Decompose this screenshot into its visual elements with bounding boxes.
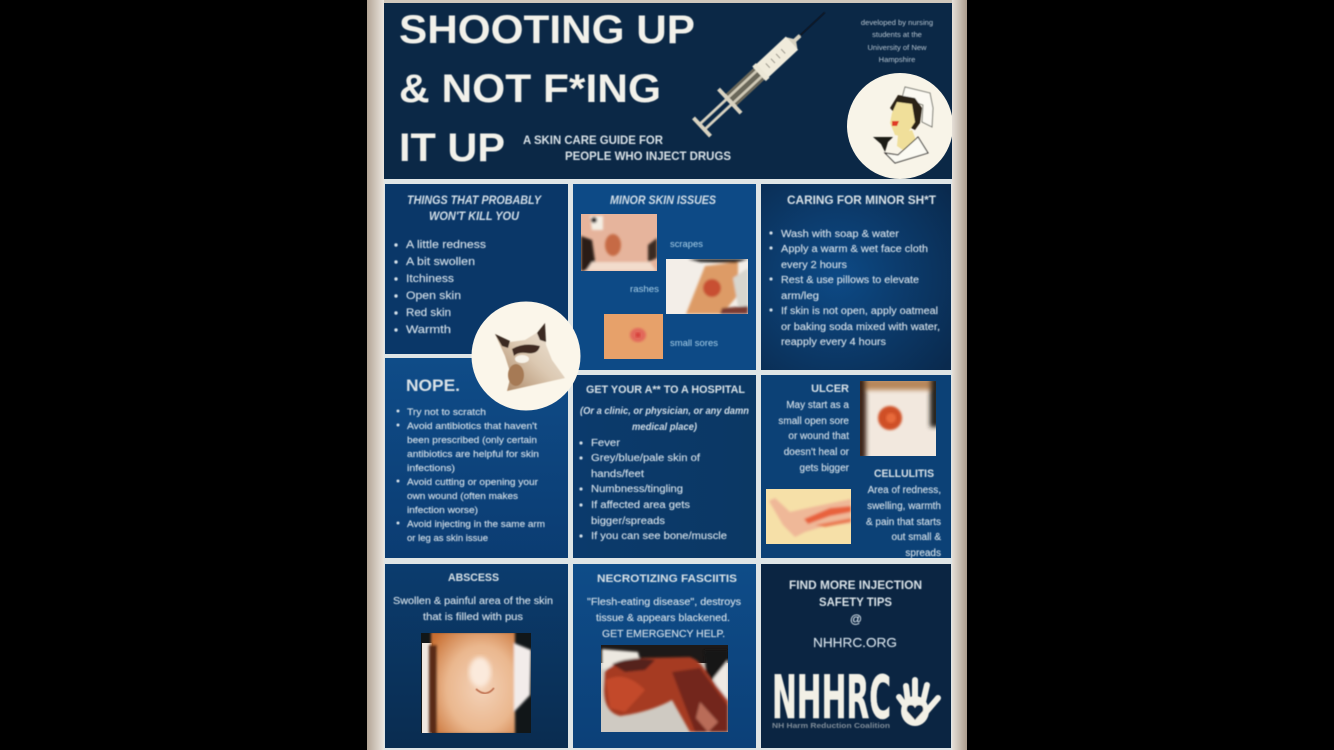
label: small sores: small sores (670, 338, 719, 348)
icon: grumpy cat (472, 302, 580, 410)
cellulitis text: Area of redness, (868, 485, 941, 496)
description: Swollen & painful area of the skin (393, 596, 553, 607)
label: scrapes: scrapes (670, 239, 704, 249)
symptom list (394, 239, 487, 336)
warning signs list: Grey/blue/pale skin of (591, 453, 700, 464)
poster background (367, 0, 967, 750)
don't list: Avoid cutting or opening your (407, 477, 538, 487)
call to action: FIND MORE INJECTION (789, 578, 922, 592)
panel: get to a hospital (573, 375, 756, 558)
don't list (396, 407, 545, 543)
description (393, 596, 553, 623)
description: GET EMERGENCY HELP. (602, 629, 725, 640)
care list: or baking soda mixed with water, (781, 322, 940, 333)
warning signs list: Fever (591, 438, 621, 449)
don't list: Avoid injecting in the same arm (407, 519, 545, 529)
warning signs list: bigger/spreads (591, 516, 665, 527)
care list: Apply a warm & wet face cloth (781, 244, 928, 255)
description: "Flesh-eating disease", destroys (587, 597, 741, 608)
symptom list: Open skin (406, 290, 461, 302)
call to action: @ (850, 612, 862, 626)
warning signs list: If you can see bone/muscle (591, 531, 727, 542)
title: SHOOTING UP (399, 8, 695, 52)
photo: small sores (604, 314, 663, 359)
heading (407, 195, 542, 223)
care list: Wash with soap & water (781, 229, 900, 240)
warning signs list: Numbness/tingling (591, 484, 683, 495)
cellulitis text: spreads (905, 548, 941, 559)
subtitle: A SKIN CARE GUIDE FOR (523, 133, 663, 147)
panel: abscess (385, 564, 568, 748)
cellulitis text: CELLULITIS (874, 468, 934, 480)
photo: necrotic leg (601, 645, 728, 732)
heading: CARING FOR MINOR SH*T (787, 193, 937, 207)
heading: NECROTIZING FASCIITIS (597, 573, 737, 585)
don't list: or leg as skin issue (407, 533, 488, 543)
panel: things that probably won't kill you (385, 184, 568, 354)
don't list: antibiotics are helpful for skin (407, 449, 539, 459)
subheading (580, 406, 749, 433)
don't list: Try not to scratch (407, 407, 486, 417)
symptom list: Warmth (406, 324, 451, 336)
ulcer text: May start as a (786, 400, 849, 411)
don't list: own wound (often makes (407, 491, 518, 501)
panel: minor skin issues (573, 184, 756, 370)
heading: GET YOUR A** TO A HOSPITAL (586, 384, 745, 396)
call to action: NHHRC.ORG (813, 635, 897, 650)
ulcer text: gets bigger (800, 463, 850, 474)
care list: every 2 hours (781, 260, 847, 271)
panel: caring for minor sh*t (761, 184, 951, 370)
don't list: infections) (407, 463, 455, 473)
photo: ulcer (860, 381, 936, 456)
heading: MINOR SKIN ISSUES (610, 195, 716, 207)
logo: NHHRC: NH Harm Reduction Coalition (772, 721, 890, 730)
panel: nope (385, 358, 568, 558)
care list: reapply every 4 hours (781, 337, 886, 348)
don't list: infection worse) (407, 505, 478, 515)
icon: nurse portrait (847, 73, 953, 179)
description (587, 597, 741, 640)
care list: arm/leg (781, 291, 819, 302)
care list: If skin is not open, apply oatmeal (781, 306, 938, 317)
credit text: developed by nursing (861, 18, 933, 27)
photo: scrapes (581, 214, 657, 271)
ulcer text: doesn't heal or (784, 447, 850, 458)
warning signs list: hands/feet (591, 469, 644, 480)
symptom list: Red skin (406, 307, 451, 319)
symptom list: A little redness (406, 239, 487, 251)
don't list: Avoid antibiotics that haven't (407, 421, 537, 431)
care list: Rest & use pillows to elevate (781, 275, 919, 286)
ulcer text (778, 383, 850, 474)
warning signs list (579, 438, 727, 542)
symptom list: Itchiness (406, 273, 455, 285)
icon: syringe (689, 0, 836, 140)
heading: WON'T KILL YOU (429, 211, 520, 223)
warning signs list: If affected area gets (591, 500, 690, 511)
icon: hand with heart (899, 680, 938, 726)
ulcer text: small open sore (778, 416, 849, 427)
don't list: been prescribed (only certain (407, 435, 537, 445)
title: IT UP (399, 126, 505, 170)
cellulitis text: out small & (892, 532, 941, 543)
care list (769, 229, 940, 348)
symptom list: A bit swollen (406, 256, 475, 268)
heading: THINGS THAT PROBABLY (407, 195, 542, 207)
call to action: SAFETY TIPS (819, 595, 892, 609)
panel: necrotizing fasciitis (573, 564, 756, 748)
subheading: (Or a clinic, or physician, or any damn (580, 406, 749, 417)
credit text: students at the (872, 30, 922, 39)
panel: find more tips: NHHRC (772, 663, 891, 733)
panel: find more tips (761, 564, 951, 748)
title (399, 8, 695, 170)
credit text: University of New (867, 43, 927, 52)
cellulitis text: & pain that starts (866, 517, 941, 528)
label: rashes: rashes (630, 284, 660, 294)
photo: cellulitis leg (766, 489, 851, 544)
heading: ABSCESS (448, 572, 499, 584)
photo: rashes (666, 259, 748, 314)
cellulitis text: swelling, warmth (867, 501, 941, 512)
header panel (384, 0, 953, 179)
photo: abscess (421, 632, 531, 734)
credit text: Hampshire (879, 55, 915, 64)
panel: ulcer and cellulitis (761, 375, 951, 559)
credit text (861, 18, 933, 64)
title: & NOT F*ING (399, 67, 661, 111)
logo: NHHRC (772, 663, 891, 733)
call to action (789, 578, 922, 650)
subheading: medical place) (632, 422, 697, 433)
description: that is filled with pus (423, 612, 523, 623)
ulcer text: or wound that (788, 431, 849, 442)
description: tissue & appears blackened. (596, 613, 730, 624)
heading: NOPE. (406, 376, 460, 395)
ulcer text: ULCER (811, 383, 849, 395)
subtitle (523, 133, 731, 163)
cellulitis text (866, 468, 941, 559)
subtitle: PEOPLE WHO INJECT DRUGS (565, 149, 731, 163)
